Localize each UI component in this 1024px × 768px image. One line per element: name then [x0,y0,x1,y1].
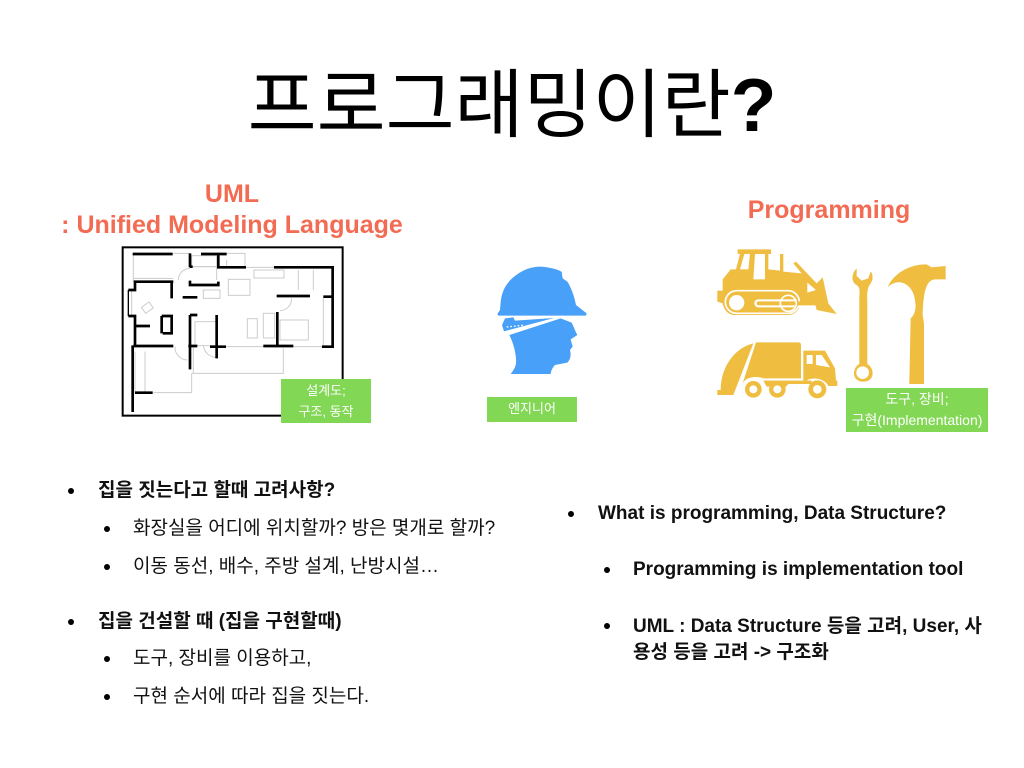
heading: Programming: Programming [748,196,910,224]
bullet: order: 구현 순서에 따라 집을 짓는다. [133,686,369,707]
bullet: bathroom: 화장실을 어디에 위치할까? 방은 몇개로 할까? [133,518,495,539]
title: 프로그래밍이란? [248,63,776,147]
icon: wrench [853,268,873,382]
label: blueprint: 구조, 동작 [298,404,354,419]
label: tools: 도구, 장비; [885,391,949,407]
bullet: UML: UML : Data Structure 등을 고려, User, 사 [633,616,982,637]
icon: garbage truck [717,342,837,398]
icon: floor plan [123,247,343,416]
bullet: building: 집을 건설할 때 (집을 구현할때) [98,611,342,632]
bullet: what is programming: What is programming, Data Structure? [598,503,946,524]
icon: engineer [497,267,587,374]
bullet: house considerations: 집을 짓는다고 할때 고려사항? [98,480,335,501]
label: tools [846,388,988,432]
bullet: circulation: 이동 동선, 배수, 주방 설계, 난방시설… [133,556,439,577]
heading: UML [61,180,403,239]
label: blueprint [281,379,371,423]
bullet: UML: 용성 등을 고려 -> 구조화 [633,642,829,663]
label: engineer [487,397,577,422]
bullet: UML [633,614,982,666]
text block: right list [568,503,982,663]
bullet: implementation tool: Programming is implementation tool [633,559,963,580]
bullet: tools: 도구, 장비를 이용하고, [133,648,311,669]
label: blueprint: 설계도; [306,383,346,398]
label: tools: 구현(Implementation) [852,412,982,428]
icon: bulldozer [717,249,837,315]
icon: hammer [888,264,946,384]
text block: left list [68,480,495,707]
label: engineer: 엔지니어 [508,401,556,416]
heading: UML: UML [205,180,259,208]
heading: UML: : Unified Modeling Language [61,211,403,239]
